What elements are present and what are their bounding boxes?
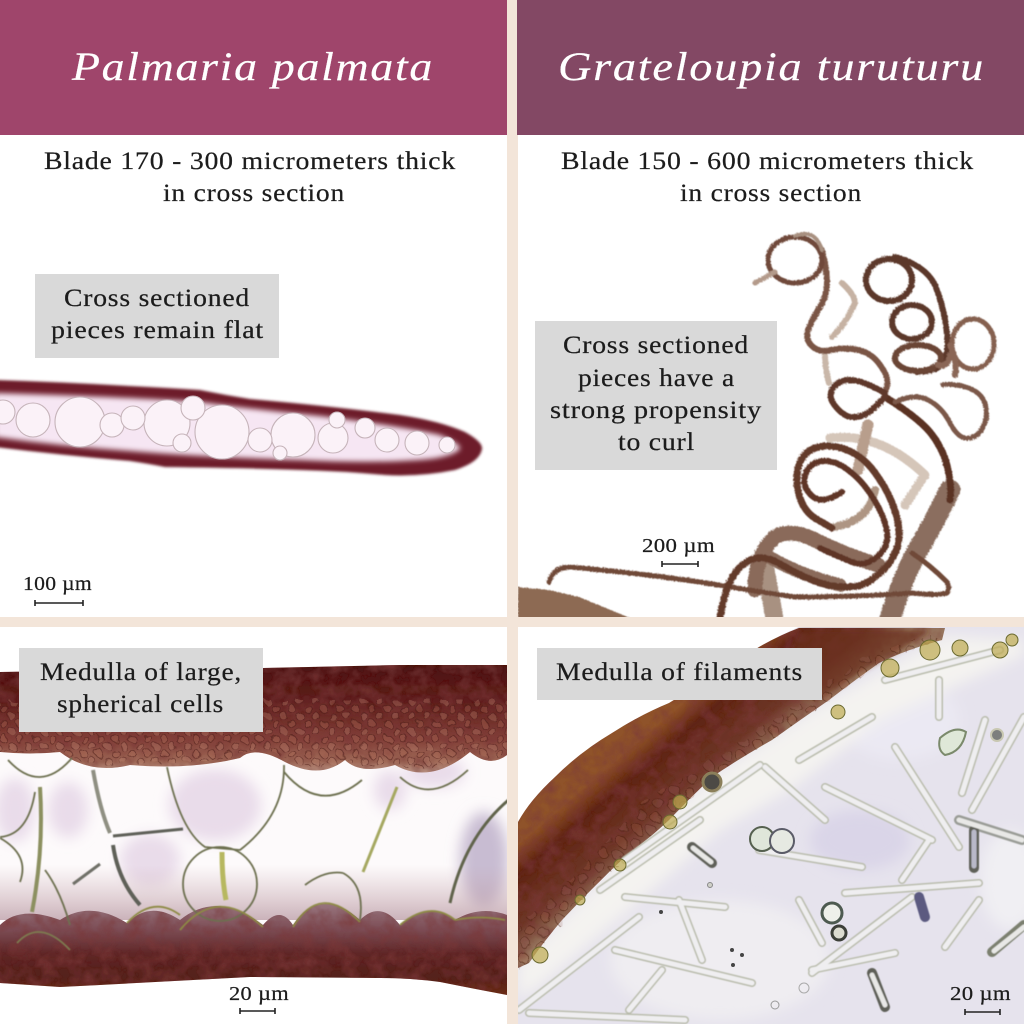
text: blade thickness, Palmaria: Blade 170 - 300 micrometers thick bbox=[44, 148, 456, 175]
callout: remain flat: pieces remain flat bbox=[51, 317, 264, 344]
scale bar: 200 µm: 200 µm bbox=[642, 535, 715, 557]
white exterior area bbox=[518, 627, 799, 822]
spherical cells and debris bbox=[659, 729, 1003, 1009]
filaments bbox=[519, 650, 1024, 1020]
outer spiral bbox=[719, 446, 899, 622]
second strand bbox=[895, 384, 986, 438]
text: blade thickness, Palmaria: in cross section bbox=[163, 180, 345, 207]
callout: spherical cells bbox=[19, 648, 263, 732]
lower cortex band bbox=[0, 904, 507, 995]
callout: propensity to curl: strong propensity bbox=[550, 397, 762, 424]
text: blade thickness, Palmaria bbox=[44, 148, 456, 207]
inner spiral bbox=[804, 461, 887, 564]
bottom strip bbox=[549, 553, 948, 597]
callout: spherical cells: Medulla of large, bbox=[40, 659, 242, 686]
panel: Grateloupia medulla bbox=[518, 627, 1024, 1024]
callout: propensity to curl bbox=[535, 321, 777, 470]
scale bar: 200 µm bbox=[642, 535, 715, 567]
callout: remain flat: Cross sectioned bbox=[64, 285, 250, 312]
callout: remain flat bbox=[35, 274, 279, 358]
callout: propensity to curl: to curl bbox=[618, 429, 695, 456]
text: blade thickness, Grateloupia: in cross section bbox=[680, 180, 862, 207]
scale bar: 20 µm, Palmaria bbox=[229, 983, 289, 1014]
header: Grateloupia turuturu bbox=[517, 0, 1024, 135]
callout: filaments: Medulla of filaments bbox=[556, 659, 803, 686]
callout: propensity to curl: pieces have a bbox=[578, 365, 735, 392]
scale bar: 20 µm, Grateloupia: 20 µm bbox=[950, 983, 1011, 1005]
callout: propensity to curl: Cross sectioned bbox=[563, 332, 749, 359]
medulla interior bbox=[0, 745, 508, 925]
header: Palmaria palmata: Palmaria palmata bbox=[71, 44, 434, 89]
header: Palmaria palmata bbox=[0, 0, 507, 135]
yellow green cells near cortex bbox=[532, 634, 1018, 963]
micrograph: curling blade bbox=[518, 234, 994, 622]
main strand bbox=[885, 397, 951, 500]
text: blade thickness, Grateloupia: Blade 150 - 600 micrometers thick bbox=[561, 148, 974, 175]
panel: Palmaria medulla bbox=[0, 627, 517, 1024]
base block bbox=[518, 587, 635, 620]
scale bar: 20 µm, Grateloupia bbox=[950, 983, 1011, 1015]
text: blade thickness, Grateloupia bbox=[561, 148, 974, 207]
scale bar: 100 µm: 100 µm bbox=[23, 573, 92, 595]
top loop bbox=[768, 237, 822, 283]
upper cortex band bbox=[0, 665, 517, 773]
panel: Palmaria cross section bbox=[0, 135, 507, 617]
micrograph: flat blade bbox=[0, 380, 482, 475]
large spherical cell walls bbox=[0, 758, 512, 950]
scale bar: 20 µm, Palmaria: 20 µm bbox=[229, 983, 289, 1005]
panel: Grateloupia cross section bbox=[518, 135, 1024, 622]
pale bands bbox=[763, 560, 775, 622]
header: Grateloupia turuturu: Grateloupia turuturu bbox=[558, 44, 985, 89]
pale background variation bbox=[518, 636, 1024, 1020]
upper spirals bbox=[866, 259, 912, 301]
callout: filaments bbox=[537, 648, 822, 700]
callout: spherical cells: spherical cells bbox=[57, 691, 224, 718]
wide band bbox=[889, 490, 950, 622]
brown cortex band bbox=[518, 628, 945, 968]
scale bar: 100 µm bbox=[23, 573, 92, 606]
